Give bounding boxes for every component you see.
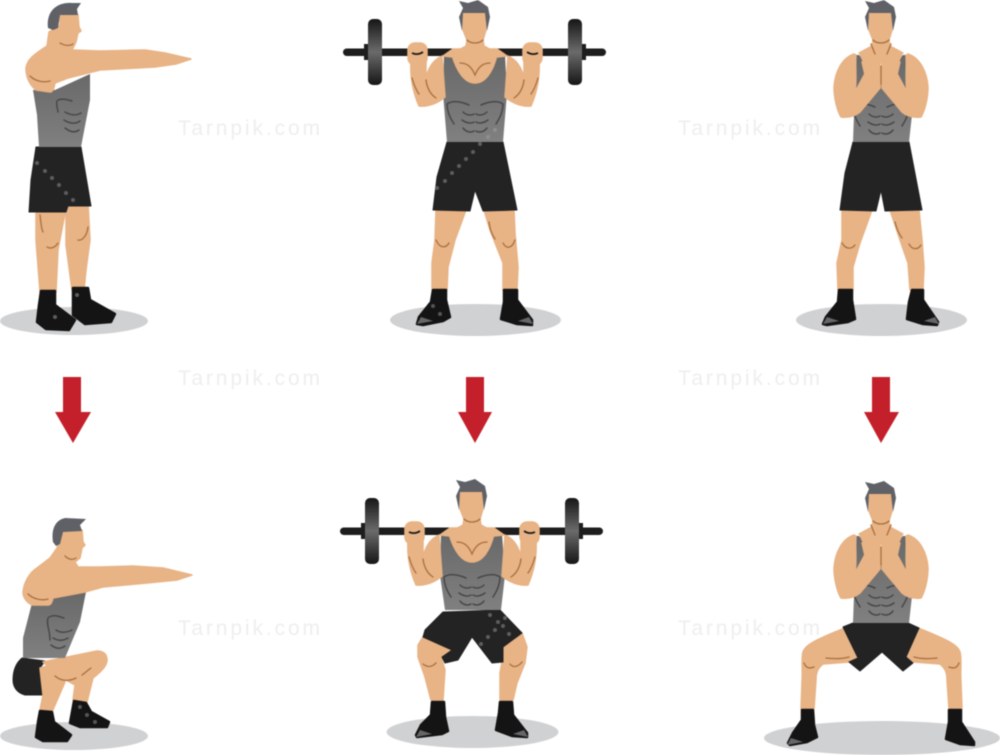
shoes — [416, 702, 527, 737]
arrow: column 1 — [55, 377, 91, 443]
shorts — [840, 142, 922, 211]
watermark dots — [35, 161, 79, 319]
back leg — [66, 203, 90, 290]
left leg — [801, 628, 858, 709]
tank top — [23, 592, 86, 658]
shorts — [423, 610, 522, 663]
barbell, arms and head — [343, 0, 606, 106]
floor shadow — [764, 721, 1000, 755]
watermarks — [178, 117, 820, 640]
front leg — [36, 208, 66, 292]
shorts — [433, 142, 517, 211]
arrow: column 2 — [458, 377, 492, 443]
watermarks: Tarnpik.com — [178, 117, 320, 140]
tank top — [443, 55, 507, 142]
floor shadow — [796, 304, 967, 336]
watermarks: Tarnpik.com — [678, 117, 820, 140]
watermark dots — [78, 705, 97, 724]
watermarks: Tarnpik.com — [178, 367, 320, 390]
watermarks: Tarnpik.com — [178, 617, 320, 640]
front shoe — [37, 291, 75, 330]
watermark dots — [479, 613, 511, 646]
figure: barbell squat standing — [343, 0, 606, 336]
abs — [447, 102, 503, 132]
floor shadow — [390, 304, 561, 336]
watermarks: Tarnpik.com — [678, 367, 820, 390]
figure: forward-arm squat standing — [0, 3, 191, 335]
back shoe — [70, 701, 109, 727]
floor shadow — [386, 716, 558, 748]
legs — [837, 210, 924, 290]
front shoe — [36, 711, 71, 741]
front shin — [40, 664, 65, 712]
head and arm — [26, 15, 191, 92]
shorts — [29, 147, 91, 212]
figure: sumo squat low — [764, 481, 1000, 755]
arrow: column 3 — [864, 377, 899, 443]
figure: forward-arm squat low — [0, 518, 192, 750]
tank top — [440, 534, 505, 610]
watermarks: Tarnpik.com — [678, 617, 820, 640]
legs — [432, 210, 518, 290]
upper body with clasped hands — [834, 481, 928, 623]
shorts — [843, 623, 919, 671]
head and arm — [23, 530, 192, 605]
back shoe — [73, 288, 115, 324]
figure: sumo squat standing — [796, 0, 967, 336]
floor shadow — [0, 722, 148, 750]
barbell, arms and head — [340, 479, 603, 585]
tank top — [33, 74, 90, 147]
watermark dots — [431, 128, 497, 316]
shoes — [417, 290, 532, 325]
abs — [47, 616, 72, 648]
abs — [57, 99, 81, 132]
abs — [444, 575, 500, 605]
legs — [418, 633, 527, 700]
chest — [449, 529, 494, 562]
shoes — [788, 710, 974, 745]
shoes — [823, 290, 938, 325]
shorts — [13, 658, 45, 695]
back leg — [43, 651, 107, 702]
figure: barbell squat low — [340, 479, 603, 748]
floor shadow — [0, 307, 148, 335]
chest — [452, 50, 497, 83]
upper body with clasped hands — [834, 0, 928, 142]
right leg — [905, 628, 962, 709]
